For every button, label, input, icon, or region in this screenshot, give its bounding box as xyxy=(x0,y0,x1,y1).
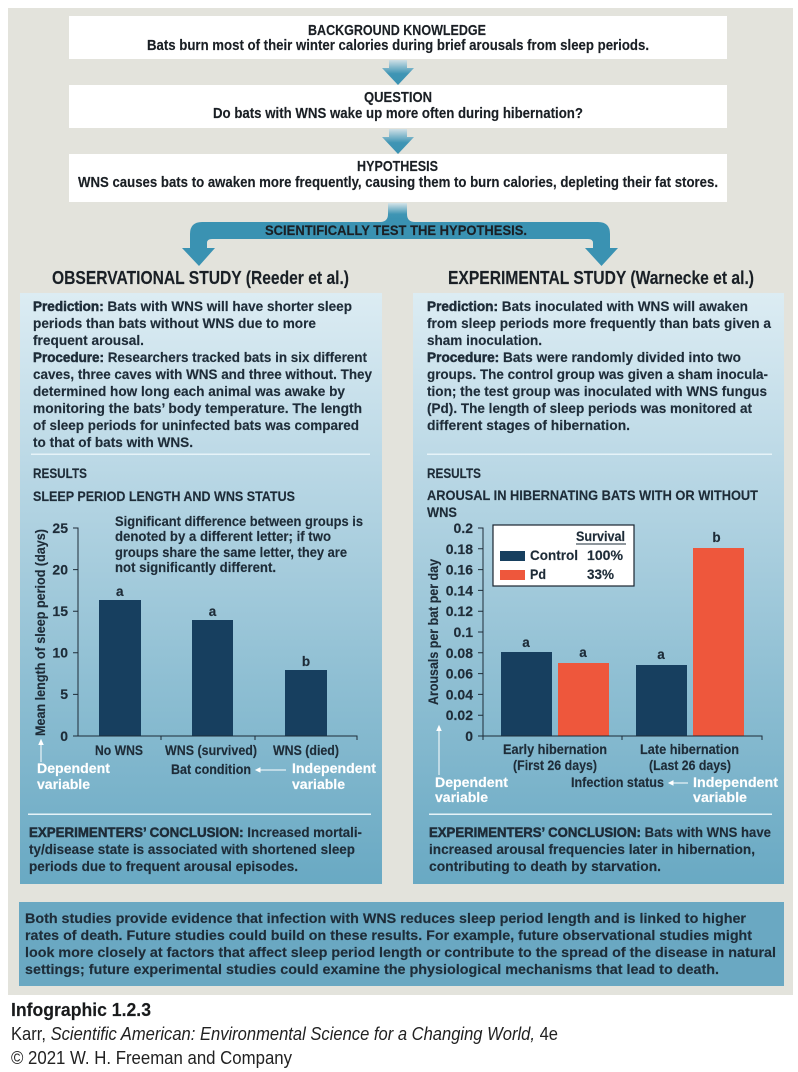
arrow: branching to both studies: SCIENTIFICALLY TEST THE HYPOTHESIS. xyxy=(265,222,527,238)
bar chart: sleep period length xyxy=(33,514,377,792)
category labels: WNS (died) xyxy=(273,743,339,758)
caption xyxy=(11,1000,558,1068)
text: prediction and procedure: caves, three caves with WNS and three without. They xyxy=(33,366,372,382)
conclusion: increased arousal frequencies later in hibernation, xyxy=(429,841,755,857)
panel: summary: look more closely at factors that affect sleep period length or contribute to the spread of the disease in natural xyxy=(25,944,776,960)
text: prediction and procedure: groups. The control group was given a sham inocula- xyxy=(427,366,768,382)
conclusion: EXPERIMENTERS’ CONCLUSION: Increased mortali- xyxy=(29,824,362,840)
legend: Pd xyxy=(530,566,546,582)
conclusion xyxy=(29,824,362,874)
text: prediction and procedure: different stages of hibernation. xyxy=(427,417,630,433)
y axis tick labels: 0.2 xyxy=(454,520,473,536)
significance letters xyxy=(116,584,310,669)
box: background knowledge: BACKGROUND KNOWLEDGE xyxy=(308,22,486,39)
text: prediction and procedure: Procedure: Bats were randomly divided into two xyxy=(427,349,741,365)
category labels xyxy=(95,743,339,777)
y axis tick labels xyxy=(446,520,473,744)
y axis tick labels: 0.04 xyxy=(446,686,473,702)
label: independent variable: Independent xyxy=(693,775,779,790)
conclusion: contributing to death by starvation. xyxy=(429,858,661,874)
arrow: question to hypothesis xyxy=(382,129,414,154)
box: background knowledge: Bats burn most of their winter calories during brief arousals from sleep periods. xyxy=(147,37,649,54)
conclusion: periods due to frequent arousal episodes. xyxy=(29,858,298,874)
bars xyxy=(99,600,327,736)
significance letters: b xyxy=(302,654,310,669)
caption: Karr, Scientific American: Environmental Science for a Changing World, 4e xyxy=(11,1024,558,1044)
significance note: denoted by a different letter; if two xyxy=(115,529,331,544)
box: hypothesis: HYPOTHESIS xyxy=(357,158,438,175)
text: prediction and procedure xyxy=(427,298,771,433)
y axis tick labels: 0.14 xyxy=(446,582,473,598)
label: independent variable xyxy=(693,775,779,805)
category labels: WNS (survived) xyxy=(165,743,257,758)
y axis tick labels: 25 xyxy=(52,520,68,536)
panel: summary: rates of death. Future studies could build on these results. For example, future observational studies might xyxy=(25,927,752,943)
category labels: No WNS xyxy=(95,743,143,758)
text: prediction and procedure: (Pd). The length of sleep periods was monitored at xyxy=(427,400,752,416)
legend: 100% xyxy=(587,547,624,563)
results heading: AROUSAL IN HIBERNATING BATS WITH OR WITHOUT xyxy=(427,488,759,503)
category labels: Bat condition xyxy=(171,762,251,777)
text: prediction and procedure: Prediction: Bats inoculated with WNS will awaken xyxy=(427,298,748,314)
results heading xyxy=(427,466,759,520)
heading: experimental study: EXPERIMENTAL STUDY (Warnecke et al.) xyxy=(448,268,754,288)
results heading: WNS xyxy=(427,505,457,520)
box: question xyxy=(69,85,727,128)
category labels: Early hibernation xyxy=(503,742,607,757)
arrow: background to question xyxy=(382,60,414,85)
box: background knowledge xyxy=(69,16,727,59)
y axis tick labels: 0.08 xyxy=(446,645,473,661)
significance letters: a xyxy=(116,584,124,599)
y axis tick labels: 0.06 xyxy=(446,666,473,682)
text: prediction and procedure: tion; the test group was inoculated with WNS fungus xyxy=(427,383,767,399)
significance letters xyxy=(522,530,721,662)
y axis tick labels: 5 xyxy=(60,686,68,702)
label: independent variable xyxy=(292,761,377,792)
label: dependent variable xyxy=(37,761,111,792)
significance note: not significantly different. xyxy=(115,560,276,575)
legend xyxy=(493,525,634,586)
panel: summary: settings; future experimental studies could examine the physiological mechanisms that lead to death. xyxy=(25,961,719,977)
y axis tick labels: 0 xyxy=(60,728,68,744)
arrow: dependent variable xyxy=(39,740,43,762)
arrow: independent variable xyxy=(669,781,688,785)
caption: © 2021 W. H. Freeman and Company xyxy=(11,1048,292,1068)
panel: experimental study xyxy=(413,293,784,884)
panel: summary: Both studies provide evidence that infection with WNS reduces sleep period length and is linked to higher xyxy=(25,910,747,926)
significance note: groups share the same letter, they are xyxy=(115,545,347,560)
bars xyxy=(501,548,744,736)
label: dependent variable: Dependent xyxy=(37,761,111,776)
y axis tick labels: 0 xyxy=(465,728,473,744)
results heading: SLEEP PERIOD LENGTH AND WNS STATUS xyxy=(33,489,295,504)
results heading: RESULTS xyxy=(33,466,87,481)
label: dependent variable: variable xyxy=(37,777,90,792)
y axis tick labels: 0.18 xyxy=(446,541,473,557)
y axis tick labels: 0.12 xyxy=(446,603,473,619)
bar chart: arousals per bat per day xyxy=(426,520,779,805)
text: prediction and procedure: monitoring the bats’ body temperature. The length xyxy=(33,400,362,416)
heading: observational study: OBSERVATIONAL STUDY (Reeder et al.) xyxy=(52,268,349,288)
label: dependent variable xyxy=(435,775,509,805)
conclusion: ty/disease state is associated with shortened sleep xyxy=(29,841,355,857)
significance letters: a xyxy=(579,645,587,660)
y axis tick labels: 10 xyxy=(52,645,68,661)
significance letters: a xyxy=(209,604,217,619)
caption: Infographic 1.2.3 xyxy=(11,1000,151,1020)
legend: 33% xyxy=(587,566,615,582)
y axis tick labels xyxy=(52,520,68,744)
label: independent variable: variable xyxy=(693,790,748,805)
arrow: independent variable xyxy=(256,768,286,772)
text: prediction and procedure: Prediction: Bats with WNS will have shorter sleep xyxy=(33,298,352,314)
panel: observational study xyxy=(20,293,382,884)
box: hypothesis xyxy=(69,154,727,202)
y axis tick labels: 0.02 xyxy=(446,707,473,723)
results heading xyxy=(33,466,295,504)
arrow: dependent variable xyxy=(437,726,441,775)
y axis label: Arousals per bat per day xyxy=(426,559,441,705)
label: independent variable: variable xyxy=(292,777,345,792)
conclusion xyxy=(429,824,771,874)
category labels: Late hibernation xyxy=(640,742,739,757)
label: dependent variable: variable xyxy=(435,790,488,805)
category labels: (First 26 days) xyxy=(513,758,597,773)
significance letters: b xyxy=(712,530,721,545)
significance letters: a xyxy=(657,647,665,662)
text: prediction and procedure: Procedure: Researchers tracked bats in six different xyxy=(33,349,367,365)
significance note xyxy=(115,514,363,575)
y axis tick labels: 20 xyxy=(52,562,68,578)
panel: summary xyxy=(19,902,784,986)
category labels: Infection status xyxy=(571,775,664,790)
arrow: branching to both studies xyxy=(182,203,618,266)
y axis tick labels: 0.16 xyxy=(446,562,473,578)
text: prediction and procedure: periods than bats without WNS due to more xyxy=(33,315,316,331)
results heading: RESULTS xyxy=(427,466,481,481)
text: prediction and procedure xyxy=(33,298,372,450)
significance note: Significant difference between groups is xyxy=(115,514,363,529)
box: hypothesis: WNS causes bats to awaken more frequently, causing them to burn calories, depleting their fat stores. xyxy=(78,174,718,191)
box: question: Do bats with WNS wake up more often during hibernation? xyxy=(213,105,583,122)
legend: Survival xyxy=(576,529,625,544)
y axis tick labels: 0.1 xyxy=(454,624,473,640)
category labels xyxy=(503,742,739,790)
axes xyxy=(478,528,762,740)
text: prediction and procedure: determined how long each animal was awake by xyxy=(33,383,345,399)
text: prediction and procedure: sham inoculation. xyxy=(427,332,542,348)
text: prediction and procedure: frequent arousal. xyxy=(33,332,144,348)
legend: Control xyxy=(530,547,578,563)
label: dependent variable: Dependent xyxy=(435,775,509,790)
y axis tick labels: 15 xyxy=(52,603,68,619)
text: prediction and procedure: to that of bats with WNS. xyxy=(33,434,193,450)
significance letters: a xyxy=(522,635,530,650)
text: prediction and procedure: from sleep periods more frequently than bats given a xyxy=(427,315,771,331)
axes xyxy=(73,528,357,740)
box: question: QUESTION xyxy=(364,89,432,106)
text: prediction and procedure: of sleep periods for uninfected bats was compared xyxy=(33,417,359,433)
y axis label: Mean length of sleep period (days) xyxy=(33,529,48,736)
label: independent variable: Independent xyxy=(292,761,377,776)
category labels: (Last 26 days) xyxy=(649,758,731,773)
conclusion: EXPERIMENTERS’ CONCLUSION: Bats with WNS have xyxy=(429,824,771,840)
